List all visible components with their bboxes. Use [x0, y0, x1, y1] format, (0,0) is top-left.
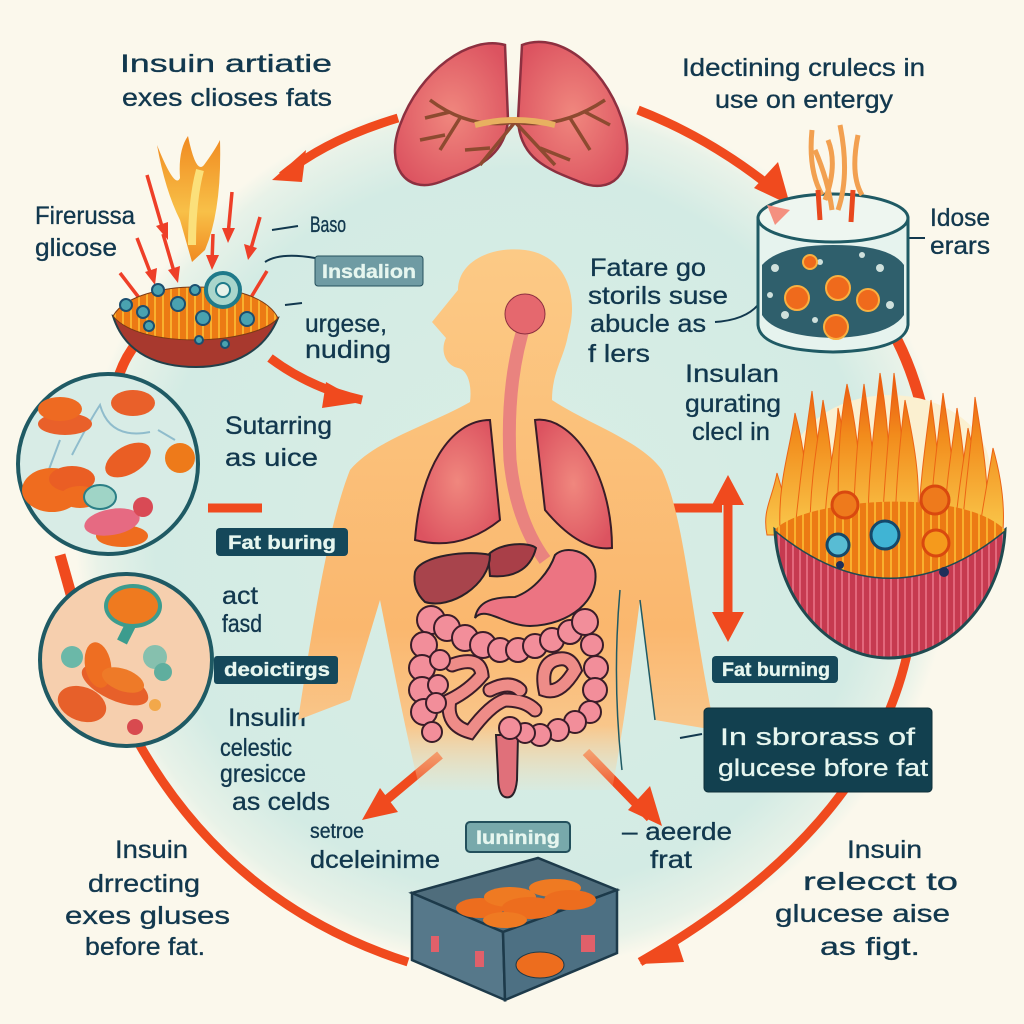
- text: bottom right: Insuin: [847, 836, 922, 864]
- tag: deoictirgs: deoictirgs: [224, 660, 330, 681]
- circle: cells upper: [18, 374, 198, 554]
- text: urgese: nuding: [305, 336, 391, 364]
- tag: fat burning left: [216, 528, 348, 556]
- text: glucose left: Firerussa: [35, 202, 135, 230]
- text: insulan: Insulan: [685, 360, 779, 388]
- tag: insdalion: [315, 256, 423, 286]
- text: fatare: Fatare go: [590, 254, 706, 282]
- text: glucose left: [35, 202, 135, 262]
- lungs: [395, 42, 627, 186]
- text: insulan: gurating: [685, 390, 781, 418]
- tag: fat burning right: Fat burning: [722, 660, 830, 681]
- small intestines: [449, 659, 575, 732]
- text: idose: [930, 204, 990, 260]
- text: glucose left: glicose: [35, 234, 117, 262]
- text: aeerde frat: [622, 818, 732, 874]
- callout: glucese bfore fat: [718, 755, 928, 782]
- text: top right: [682, 54, 925, 114]
- text: insulin celestic: as celds: [232, 788, 330, 816]
- colon: [409, 606, 608, 746]
- text: insulin celestic: [220, 704, 440, 874]
- text: baso: Baso: [310, 212, 346, 237]
- text: insulin celestic: celestic: [220, 734, 292, 762]
- left lung: [415, 420, 500, 543]
- flame bowl: [766, 373, 1005, 658]
- text: top left: Insuin artiatie: [120, 50, 332, 78]
- tag: fat burning left: Fat buring: [228, 533, 336, 554]
- text: sutarring: as uice: [225, 444, 318, 472]
- text: fatare: f lers: [588, 340, 650, 368]
- side line: [616, 590, 655, 770]
- text: urgese: urgese,: [305, 310, 387, 338]
- tag: deoictirgs: [214, 656, 338, 684]
- text: top left: exes clioses fats: [122, 84, 332, 112]
- body figure: [298, 249, 715, 797]
- text: act fasd: [222, 582, 262, 638]
- text: bottom left: Insuin: [115, 836, 188, 864]
- text: idose: Idose: [930, 204, 990, 232]
- tag: fat burning right: [712, 656, 838, 683]
- text: act fasd: fasd: [222, 610, 262, 638]
- text: aeerde frat: frat: [650, 846, 692, 874]
- text: insulin celestic: setroe: [310, 820, 364, 843]
- text: bottom right: [775, 836, 958, 961]
- text: insulin celestic: gresicce: [220, 760, 306, 788]
- text: top right: use on entergy: [715, 86, 894, 114]
- text: bottom right: as figt.: [820, 933, 920, 961]
- bowl with flames: [113, 136, 278, 367]
- text: urgese: [305, 310, 391, 364]
- storage box: [412, 858, 617, 1000]
- text: idose: erars: [930, 232, 990, 260]
- text: insulin celestic: Insulin: [228, 704, 306, 732]
- esophagus: [509, 320, 545, 560]
- callout: [704, 708, 932, 792]
- text: fatare: [588, 254, 728, 368]
- text: fatare: abucle as: [590, 310, 706, 338]
- text: aeerde frat: – aeerde: [622, 818, 732, 846]
- glass jar: [758, 125, 908, 352]
- central pale circle: [75, 90, 955, 970]
- text: top right: Idectining crulecs in: [682, 54, 925, 82]
- text: sutarring: Sutarring: [225, 412, 332, 440]
- text: bottom right: glucese aise: [775, 900, 950, 928]
- text: sutarring: [225, 412, 332, 472]
- circle: cells lower: [40, 574, 212, 746]
- text: insulan: [685, 360, 781, 446]
- right lung: [535, 420, 612, 548]
- text: top left: [120, 50, 332, 112]
- arrows into bowl: [120, 175, 267, 299]
- small pointers: [265, 226, 925, 738]
- text: bottom left: exes gluses: [65, 902, 230, 930]
- callout: In sbrorass of: [720, 724, 915, 751]
- tag: funining: [466, 822, 570, 852]
- tag: insdalion: Insdalion: [322, 262, 416, 283]
- stomach: [475, 550, 596, 626]
- text: bottom left: drrecting: [88, 870, 200, 898]
- text: bottom left: [65, 836, 230, 961]
- text: bottom left: before fat.: [85, 933, 205, 961]
- cycle arrows: [60, 110, 935, 964]
- tag: funining: Iunining: [476, 828, 560, 849]
- text: insulin celestic: dceleinime: [310, 846, 440, 874]
- text: fatare: storils suse: [588, 282, 728, 310]
- liver: [414, 544, 536, 604]
- rectum: [496, 735, 518, 797]
- text: insulan: clecl in: [692, 418, 770, 446]
- text: bottom right: relecct to: [803, 868, 958, 896]
- text: act fasd: act: [222, 582, 258, 610]
